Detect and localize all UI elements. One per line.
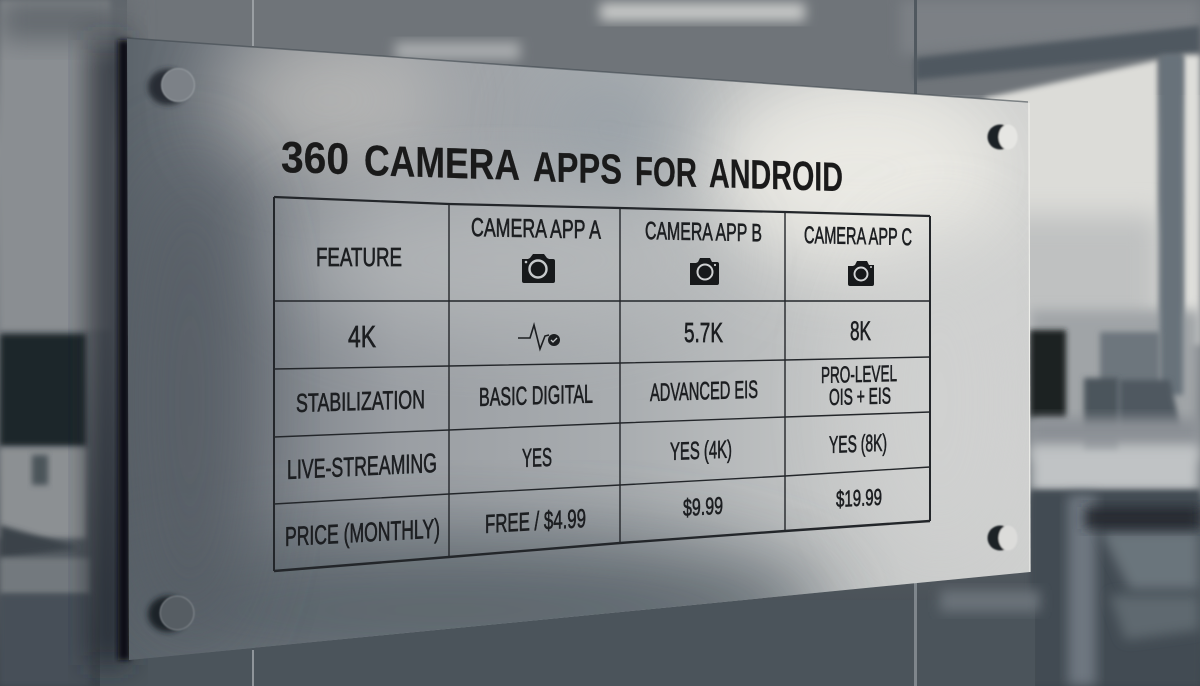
- title: 360: [281, 133, 349, 184]
- row label: stabilization: STABILIZATION: [296, 384, 425, 418]
- screw: top right: [988, 124, 1018, 150]
- icon: pulse with check: [518, 325, 560, 349]
- screw: bottom left: [148, 596, 194, 632]
- value: free / 4.99: FREE / $4.99: [485, 503, 586, 539]
- value: 19.99: $19.99: [836, 484, 882, 512]
- brushed metal plate: [127, 38, 1031, 660]
- value: yes 4K: YES (4K): [670, 436, 732, 466]
- value: advanced EIS: ADVANCED EIS: [650, 376, 758, 407]
- value: pro-level OIS + EIS: OIS + EIS: [829, 382, 891, 410]
- icon: camera B: [690, 258, 719, 285]
- title: FOR: [635, 148, 697, 196]
- icon: camera A: [522, 254, 555, 283]
- title: [281, 133, 843, 200]
- title: APPS: [533, 143, 622, 193]
- value: 8K: 8K: [850, 316, 871, 346]
- screw: top left: [148, 68, 194, 105]
- title: CAMERA: [364, 137, 520, 190]
- value: basic digital: BASIC DIGITAL: [479, 379, 593, 412]
- header: feature: FEATURE: [316, 242, 402, 272]
- value: yes: YES: [522, 442, 552, 473]
- header: camera app B: CAMERA APP B: [645, 217, 762, 247]
- comparison table: [274, 197, 930, 571]
- row label: live-streaming: LIVE-STREAMING: [287, 448, 437, 485]
- header: camera app C: CAMERA APP C: [804, 222, 912, 251]
- row label: 4K: 4K: [348, 319, 376, 354]
- title: ANDROID: [709, 150, 843, 200]
- value: yes 8K: YES (8K): [829, 430, 887, 459]
- value: 9.99: $9.99: [683, 493, 723, 522]
- header: camera app A: CAMERA APP A: [471, 212, 601, 245]
- screw: bottom right: [988, 526, 1018, 550]
- row label: price monthly: PRICE (MONTHLY): [285, 513, 440, 552]
- table grid: [274, 197, 930, 571]
- value: pro-level OIS + EIS: [821, 360, 897, 410]
- value: pro-level OIS + EIS: PRO-LEVEL: [821, 360, 897, 388]
- icon: camera C: [848, 261, 874, 286]
- value: 5.7K: 5.7K: [684, 317, 723, 348]
